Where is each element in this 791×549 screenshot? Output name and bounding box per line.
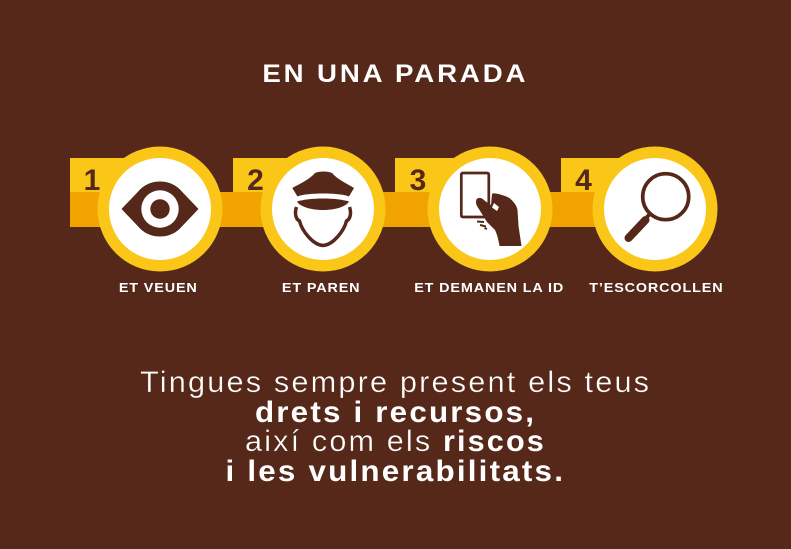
icon: hand holding ID card: [461, 173, 522, 246]
step 4: [561, 146, 718, 272]
step 4: 4: [575, 164, 592, 197]
closing message: drets i recursos,: [255, 396, 536, 428]
step 1: [70, 146, 222, 272]
step 3: 3: [410, 164, 426, 197]
orange connecting band: [70, 192, 600, 227]
closing message: Tingues sempre present els teus: [140, 366, 651, 399]
step 3: [395, 146, 552, 272]
label: t'escorcollen: T’ESCORCOLLEN: [589, 281, 724, 295]
label: et paren: ET PAREN: [282, 281, 361, 295]
step 2: 2: [247, 164, 264, 197]
icon: eye: [122, 182, 198, 236]
closing message: [140, 366, 651, 488]
closing message: així com els riscos: [245, 425, 546, 458]
title: EN UNA PARADA: [262, 60, 528, 88]
step 2: [233, 146, 386, 272]
icon: magnifying glass: [628, 174, 689, 238]
step 1: 1: [84, 164, 100, 197]
icon: police officer: [292, 172, 354, 246]
closing message: i les vulnerabilitats.: [226, 455, 565, 488]
label: et demanen la id: ET DEMANEN LA ID: [415, 281, 564, 295]
label: et veuen: ET VEUEN: [119, 281, 197, 295]
